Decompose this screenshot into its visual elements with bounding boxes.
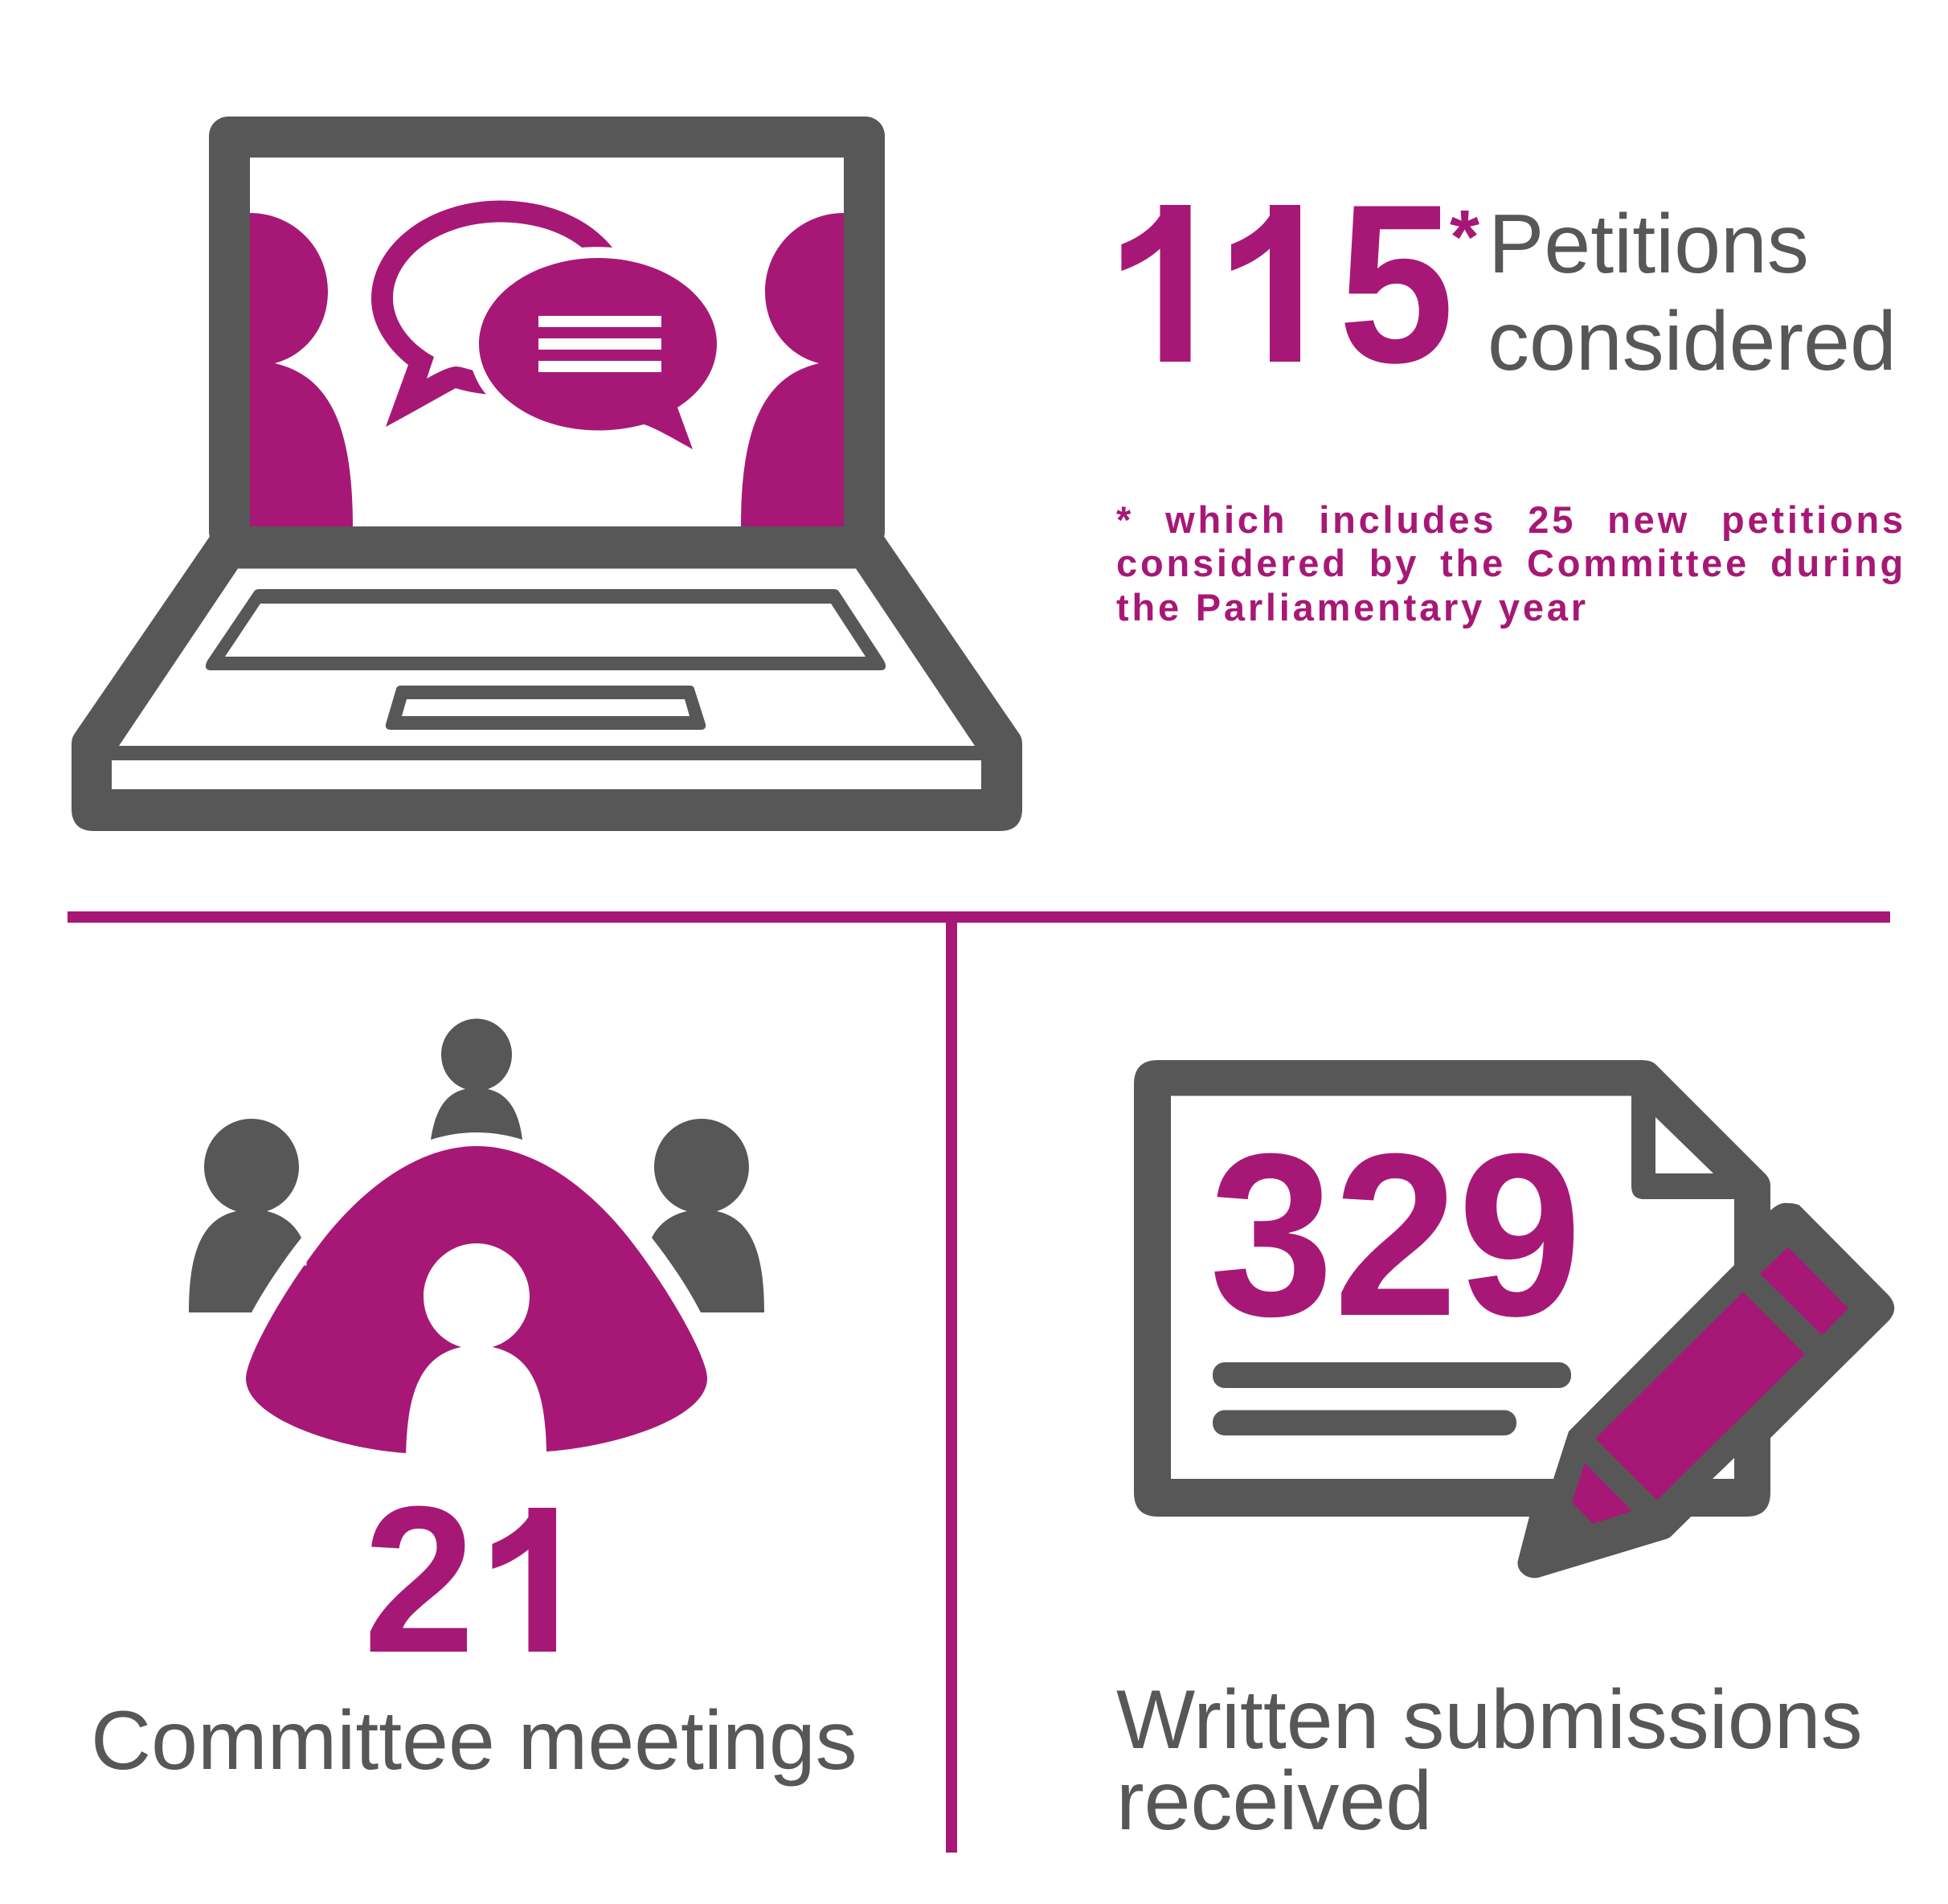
trackpad	[386, 686, 706, 730]
left person on screen	[250, 213, 353, 526]
divider: horizontal	[68, 911, 1890, 923]
top person	[431, 1019, 522, 1140]
number 21	[363, 1464, 593, 1697]
divider: vertical	[946, 923, 957, 1853]
footnote: the Parliamentary year	[1116, 585, 1589, 629]
page corner	[1713, 1458, 1734, 1479]
laptop front strip	[112, 760, 981, 789]
number 115: 11	[1112, 158, 1338, 410]
laptop deck	[119, 569, 975, 746]
label: Committee meetings: Committee meetings	[91, 1694, 857, 1787]
filled speech bubble	[479, 258, 717, 449]
pencil eraser	[1760, 1247, 1848, 1336]
table	[246, 1146, 707, 1453]
text line 2	[1213, 1410, 1516, 1435]
number 21: 1	[481, 1464, 593, 1697]
number 115: 5	[1338, 158, 1455, 410]
icon: laptop with online discussion	[72, 117, 1022, 831]
footnote	[1116, 498, 1906, 629]
left person	[189, 1119, 301, 1312]
stat: 115 petitions	[1105, 158, 1897, 410]
pencil tip	[1572, 1463, 1632, 1524]
icon: meeting around a table	[189, 1019, 764, 1459]
person at table	[406, 1243, 546, 1459]
right person on screen	[741, 213, 844, 526]
asterisk: *	[1450, 194, 1479, 280]
page interior	[1171, 1096, 1734, 1479]
pencil body outline	[1517, 1203, 1894, 1578]
page fold	[1655, 1117, 1713, 1173]
laptop lid	[209, 117, 885, 551]
number 21: 2	[363, 1464, 475, 1697]
laptop base	[72, 535, 1022, 831]
number 115	[1105, 158, 1455, 410]
document page	[1134, 1060, 1770, 1517]
bubble text lines	[538, 316, 661, 372]
footnote: * which includes 25 new petitions	[1116, 498, 1906, 540]
number 329: 329	[1209, 1105, 1582, 1364]
stat: 21 committee meetings	[91, 1464, 857, 1787]
laptop screen	[250, 158, 844, 526]
label: Written submissions received: Written submissions	[1116, 1673, 1863, 1767]
keyboard	[206, 589, 886, 670]
pencil barrel	[1595, 1292, 1805, 1500]
icon: document with pencil	[1134, 1060, 1894, 1578]
right person	[652, 1119, 764, 1312]
outlined speech bubble	[371, 201, 612, 427]
footnote: considered by the Committee during	[1116, 542, 1906, 584]
label: Petitions considered: considered	[1488, 295, 1897, 388]
text line 1	[1213, 1362, 1571, 1388]
label: Petitions considered: Petitions	[1488, 198, 1809, 291]
label: Written submissions received: received	[1116, 1755, 1432, 1848]
pencil	[1517, 1203, 1894, 1578]
